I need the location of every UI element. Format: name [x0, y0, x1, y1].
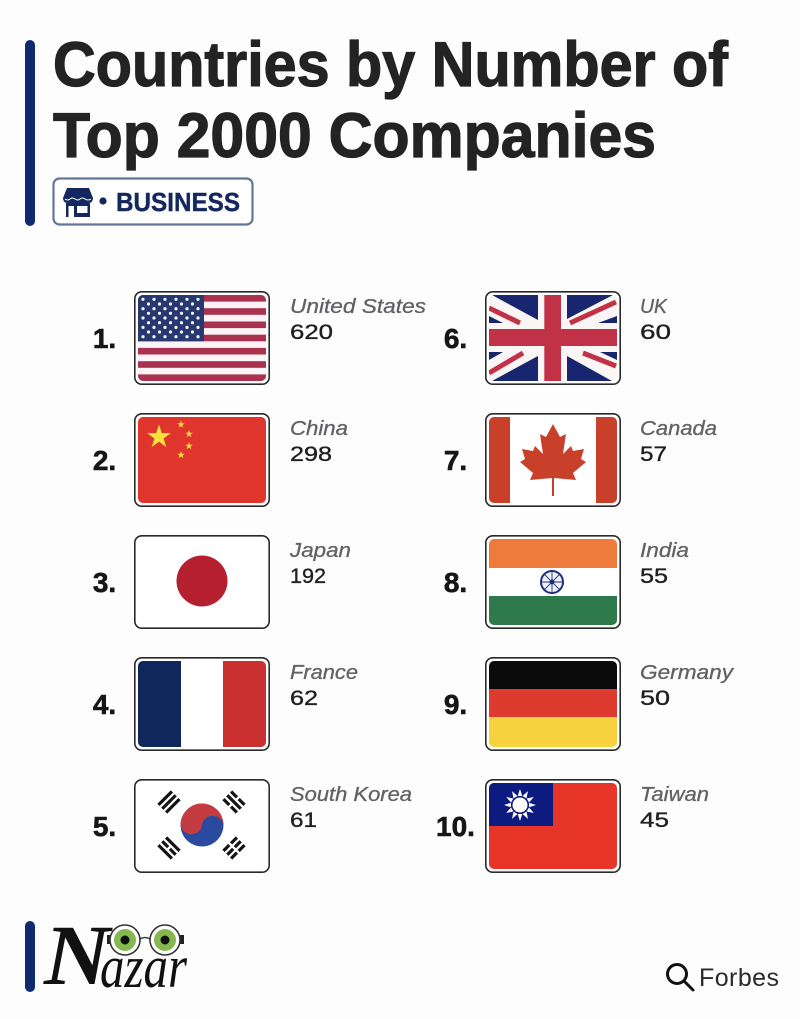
logo: Nazar: N — [43, 907, 113, 1003]
rank 8: India — [444, 536, 689, 628]
title: Countries by Number of — [53, 30, 729, 100]
rank 9: Germany — [444, 658, 734, 750]
rank 5: South Korea — [93, 780, 412, 872]
rank 6: UK: UK — [640, 296, 669, 318]
rank 5: South Korea: South Korea — [290, 784, 412, 806]
flag: Germany — [486, 658, 620, 750]
flag: UK — [486, 292, 620, 384]
rank 7: Canada: Canada — [640, 418, 717, 440]
footer accent bar — [25, 921, 35, 992]
rank 1: United States: 1. — [93, 323, 116, 354]
icon: store — [63, 188, 93, 217]
icon: magnifier — [668, 964, 693, 990]
source: Forbes: Forbes — [699, 964, 779, 992]
flag: South Korea — [135, 780, 269, 872]
flag: India — [486, 536, 620, 628]
header accent bar — [25, 40, 35, 226]
rank 8: India: 8. — [444, 567, 467, 598]
rank 2: China — [93, 414, 348, 506]
rank 2: China: China — [290, 418, 348, 440]
flag: United States — [135, 292, 269, 384]
rank 8: India: 55 — [640, 565, 668, 588]
rank 7: Canada — [444, 414, 717, 506]
rank 10: Taiwan: Taiwan — [640, 784, 709, 806]
rank 1: United States: United States — [290, 296, 426, 318]
rank 1: United States — [93, 292, 426, 384]
rank 8: India: India — [640, 540, 689, 562]
rank 7: Canada: 7. — [444, 445, 467, 476]
flag: Canada — [486, 414, 620, 506]
rank 4: France: 4. — [93, 689, 116, 720]
rank 4: France: France — [290, 662, 358, 684]
logo: Nazar: azar — [100, 934, 188, 1000]
rank 4: France: 62 — [290, 687, 318, 710]
rank 3: Japan: 3. — [93, 567, 116, 598]
rank 10: Taiwan: 10. — [436, 811, 475, 842]
rank 6: UK: 6. — [444, 323, 467, 354]
rank 9: Germany: Germany — [640, 662, 734, 684]
rank 9: Germany: 9. — [444, 689, 467, 720]
rank 7: Canada: 57 — [640, 443, 667, 466]
rank 6: UK — [444, 292, 671, 384]
icon: glasses with green eyes — [107, 925, 184, 955]
logo: Nazar — [43, 907, 188, 1003]
flag: China — [135, 414, 269, 506]
rank 3: Japan: 192 — [290, 565, 326, 588]
rank 2: China: 298 — [290, 443, 332, 466]
rank 5: South Korea: 61 — [290, 809, 317, 832]
rank 4: France — [93, 658, 358, 750]
rank 10: Taiwan: 45 — [640, 809, 669, 832]
category badge: business — [54, 178, 252, 224]
rank 9: Germany: 50 — [640, 687, 670, 710]
rank 5: South Korea: 5. — [93, 811, 116, 842]
flag: France — [135, 658, 269, 750]
rank 1: United States: 620 — [290, 321, 333, 344]
rank 3: Japan — [93, 536, 351, 628]
title — [53, 30, 729, 171]
flag: Taiwan — [486, 780, 620, 872]
flag: Japan — [135, 536, 269, 628]
rank 6: UK: 60 — [640, 321, 671, 344]
rank 10: Taiwan — [436, 780, 709, 872]
category badge: business: BUSINESS — [116, 187, 240, 217]
rank 3: Japan: Japan — [289, 540, 351, 562]
title: Top 2000 Companies — [53, 101, 656, 171]
rank 2: China: 2. — [93, 445, 116, 476]
